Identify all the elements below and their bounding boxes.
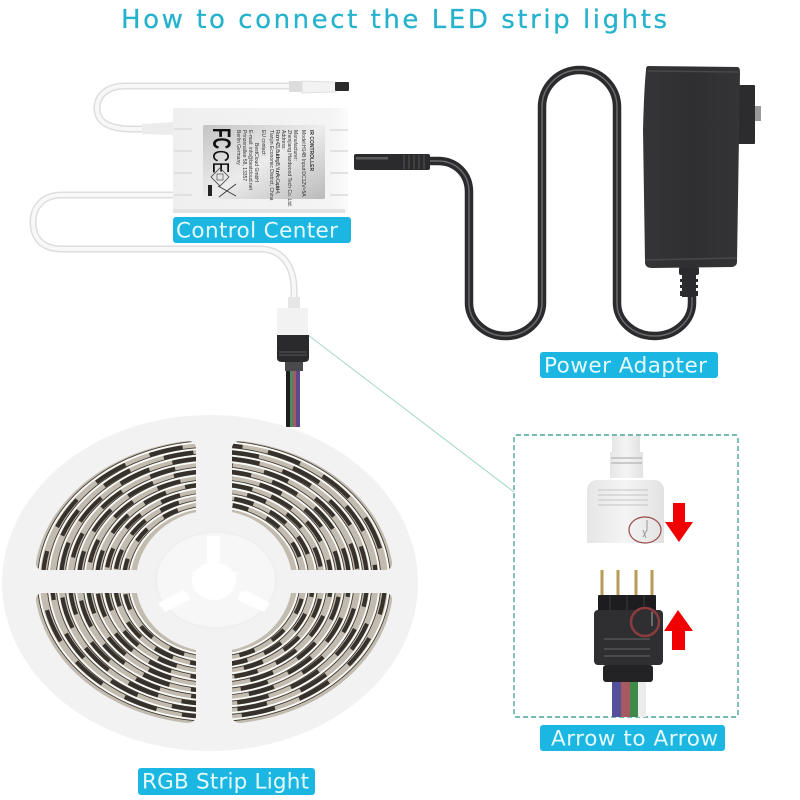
plate text: Berlin Germany: [235, 130, 241, 165]
plate text: E-mail: info@bestcloud.net: [247, 130, 253, 190]
label plate: [203, 125, 325, 199]
plate text: Address:: [280, 130, 286, 150]
strain relief: [679, 267, 699, 297]
plate text: BestCloud GmbH: [253, 143, 259, 182]
white cable to RGB connector: [33, 195, 294, 300]
FCC and CE marks: FC: [207, 128, 235, 149]
colored wires: [612, 682, 646, 717]
pin arrow mark: [631, 608, 659, 636]
RGB wire to reel: [286, 370, 300, 427]
FCC and CE marks: CE: [208, 150, 234, 173]
adapter cable: [430, 70, 692, 336]
plate text: Manufacturer:: [292, 130, 298, 161]
power adapter label: Power Adapter: [544, 354, 707, 378]
LED strip reel: [2, 415, 418, 751]
power adapter with cable: [354, 66, 761, 336]
white output cable with DC plug: [97, 81, 349, 135]
safety symbols: [208, 168, 236, 197]
connection leader line: [308, 335, 514, 492]
coiled strip quadrants: [38, 440, 390, 722]
socket arrow mark: [629, 517, 661, 543]
control center label: Control Center: [176, 218, 338, 244]
plate text: IR CONTROLLER: [308, 130, 314, 171]
arrow to arrow label: Arrow to Arrow: [551, 726, 718, 752]
controller box: [173, 108, 348, 213]
adapter body: [643, 66, 740, 268]
plate text: Room 421, Building B, YunAo Capital 4,: [274, 130, 280, 194]
plate text: Model:H14B Input:DC12V=5A: [300, 130, 306, 197]
red arrow up: [664, 610, 693, 650]
black pin connector: [594, 570, 663, 717]
RGB strip light label: RGB Strip Light: [142, 770, 309, 794]
inline connector pair: [277, 297, 309, 371]
title: How to connect the LED strip lights: [121, 5, 667, 35]
DC barrel connector: [354, 154, 430, 170]
plate text: Tianjin Economic District, China: [268, 130, 274, 201]
arrow to arrow detail panel: [514, 435, 738, 717]
plate text: Zhenjiang Hardwood Tech Co. Ltd.: [286, 130, 292, 207]
dashed frame: [514, 435, 738, 717]
reel hub: [156, 532, 276, 628]
plate text: [235, 130, 314, 207]
plate text: EU contact:: [260, 130, 266, 156]
adapter prongs: [738, 85, 761, 144]
reel disc: [2, 415, 418, 751]
side notches: [174, 129, 348, 195]
white socket connector: [587, 436, 664, 543]
plate text: Prinzenallee 58, 13357: [241, 130, 247, 181]
red arrow down: [665, 503, 693, 542]
